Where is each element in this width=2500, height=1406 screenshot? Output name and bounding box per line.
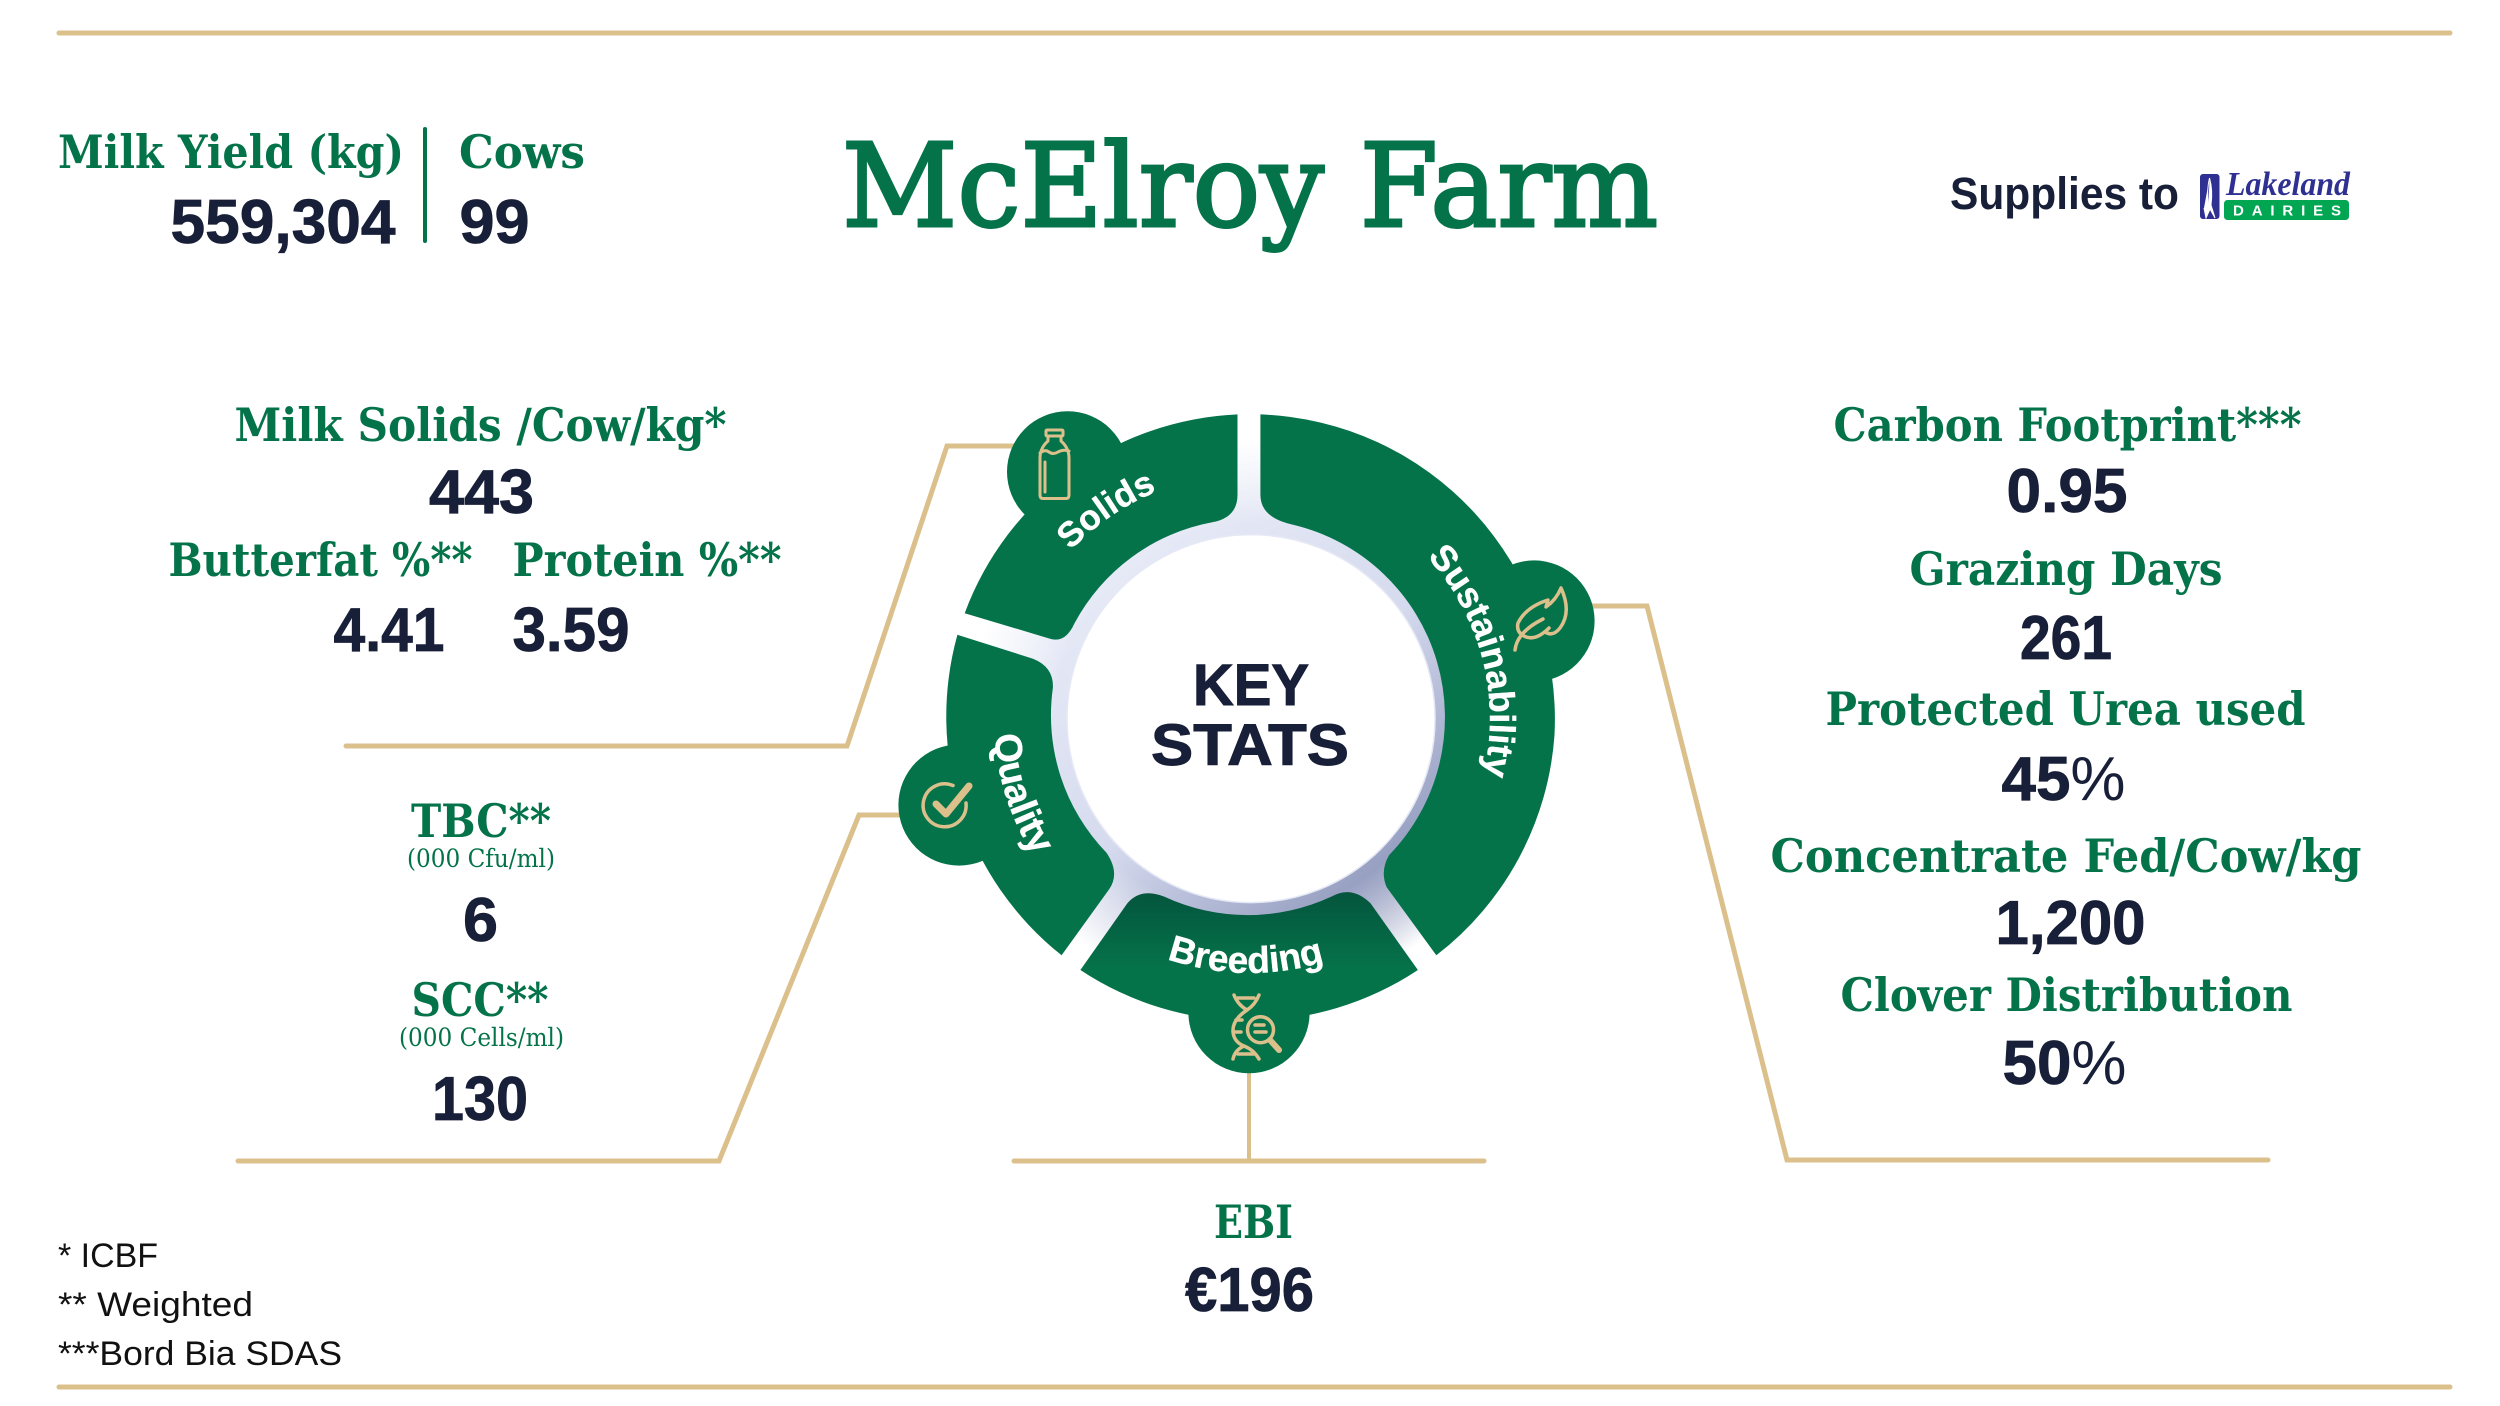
concentrate value: 1,200 [1996, 889, 2146, 958]
sustainability label: Sustainability [1430, 545, 1516, 779]
footnotes [58, 1237, 342, 1373]
bottom rule [59, 1384, 2450, 1390]
footnote icbf: * ICBF [58, 1237, 158, 1275]
connector: solids [346, 446, 1030, 746]
scc unit: (000 Cells/ml) [399, 1023, 564, 1052]
center disc [1067, 535, 1435, 903]
icon: milk bottle [1040, 430, 1069, 498]
segment: solids [964, 411, 1238, 640]
segment: sustainability [1260, 414, 1595, 956]
segment: breeding [1080, 892, 1418, 1074]
protected urea value: 45% [2002, 745, 2126, 814]
milk solids value: 443 [429, 458, 534, 527]
scc value: 130 [432, 1065, 528, 1134]
panel: breeding stats [1185, 1195, 1314, 1325]
butterfat value: 4.41 [334, 596, 444, 665]
supplies to with logo [1950, 166, 2351, 220]
milk yield value: 559,304 [170, 188, 396, 257]
tbc label: TBC** [411, 794, 551, 848]
lakeland wordmark: Lakeland [2225, 166, 2351, 203]
protein label: Protein %** [512, 533, 782, 587]
clover value: 50% [2002, 1029, 2126, 1098]
key stats heading: STATS [1151, 713, 1349, 778]
divider [423, 127, 427, 243]
butterfat label: Butterfat %** [168, 533, 472, 587]
milk yield label: Milk Yield (kg) [58, 125, 404, 179]
key stats heading: KEY [1193, 653, 1309, 718]
supplies to text: Supplies to [1950, 168, 2179, 219]
panel: sustainability stats [1770, 398, 2362, 1098]
connector: sustainability [1570, 606, 2268, 1160]
connector: breeding [1014, 1060, 1484, 1161]
wheel halo [945, 414, 1555, 1024]
tbc unit: (000 Cfu/ml) [407, 844, 555, 873]
panel: quality stats [399, 794, 564, 1134]
solids label: Solids [1058, 476, 1154, 547]
quality label: Quality [988, 734, 1052, 850]
scc label: SCC** [412, 973, 548, 1027]
cows value: 99 [460, 188, 530, 257]
icon: lakeland reed logo [2200, 174, 2220, 219]
protected urea label: Protected Urea used [1826, 682, 2306, 736]
breeding label: Breeding [1168, 935, 1323, 974]
cows label: Cows [459, 125, 585, 179]
carbon footprint value: 0.95 [2006, 457, 2128, 526]
ebi label: EBI [1214, 1195, 1293, 1249]
title: McElroy Farm [842, 120, 1658, 254]
carbon footprint label: Carbon Footprint*** [1834, 398, 2302, 452]
icon: leaf [1515, 588, 1566, 650]
dairies badge: DAIRIES [2233, 202, 2341, 220]
footnote weighted: ** Weighted [58, 1286, 253, 1324]
footnote bord bia: ***Bord Bia SDAS [58, 1335, 342, 1373]
connector: quality [238, 815, 930, 1161]
icon: dna with magnifier [1233, 995, 1279, 1059]
ebi value: €196 [1185, 1256, 1314, 1325]
grazing days value: 261 [2020, 604, 2112, 673]
icon: check mark [923, 784, 969, 827]
grazing days label: Grazing Days [1910, 542, 2222, 596]
clover label: Clover Distribution [1840, 968, 2292, 1022]
segment: quality [898, 634, 1114, 956]
headline stats: milk yield and cows [58, 125, 585, 257]
protein value: 3.59 [512, 596, 630, 665]
tbc value: 6 [463, 886, 498, 955]
key stats heading [1151, 653, 1349, 778]
key stats wheel [898, 411, 1595, 1074]
milk solids label: Milk Solids /Cow/kg* [234, 398, 726, 452]
top rule [59, 30, 2450, 36]
panel: solids stats [168, 398, 782, 665]
concentrate label: Concentrate Fed/Cow/kg [1770, 829, 2362, 883]
